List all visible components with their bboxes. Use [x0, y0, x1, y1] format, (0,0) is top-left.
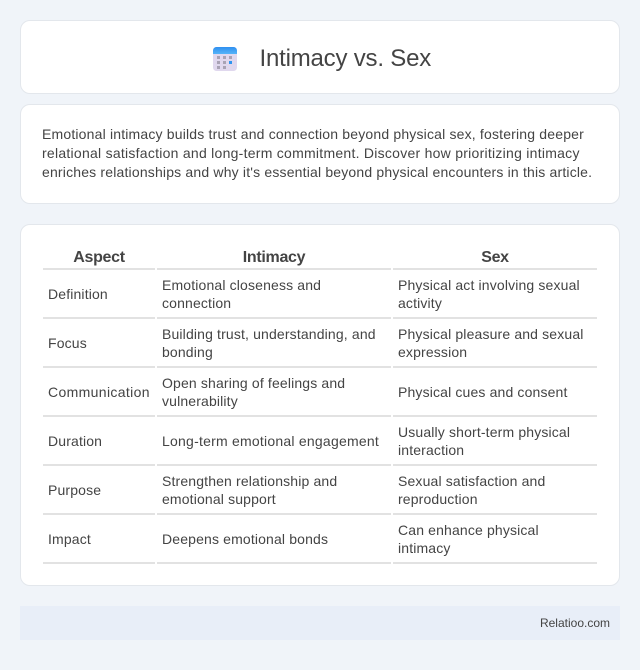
row: Impact	[48, 522, 539, 556]
row: Communication: Physical cues and consent	[398, 384, 568, 400]
intro paragraph: relational satisfaction and long-term commitment. Discover how prioritizing intimacy	[42, 145, 580, 161]
row: Duration: interaction	[398, 442, 464, 458]
row: Purpose: reproduction	[398, 491, 478, 507]
row: Communication: Communication	[48, 384, 150, 400]
row: Duration: Long-term emotional engagement	[162, 433, 379, 449]
row: Purpose: Strengthen relationship and	[162, 473, 337, 489]
row: Duration: Duration	[48, 433, 102, 449]
column header: Aspect: Aspect	[73, 249, 125, 266]
title: Intimacy vs. Sex	[260, 45, 431, 72]
row: Focus: bonding	[162, 344, 213, 360]
footer source text: Relatioo.com	[540, 616, 610, 630]
icon: calendar	[213, 47, 237, 71]
row: Focus: Focus	[48, 335, 87, 351]
row: Definition	[48, 277, 580, 311]
row: Communication	[48, 375, 568, 409]
row: Definition: Definition	[48, 286, 108, 302]
footer bar	[20, 606, 620, 640]
header panel	[20, 20, 620, 94]
intro text panel	[20, 104, 620, 204]
column header: Sex: Sex	[481, 249, 509, 266]
intro paragraph	[42, 126, 592, 180]
row: Purpose	[48, 473, 545, 507]
comparison table panel	[20, 224, 620, 586]
row: Focus: Physical pleasure and sexual	[398, 326, 584, 342]
column header: Intimacy: Intimacy	[243, 249, 305, 266]
row: Focus	[48, 326, 584, 360]
row: Definition: Emotional closeness and	[162, 277, 321, 293]
row: Purpose: emotional support	[162, 491, 276, 507]
row: Definition: activity	[398, 295, 442, 311]
intro paragraph: Emotional intimacy builds trust and connection beyond physical sex, fostering deeper	[42, 126, 584, 142]
row: Definition: connection	[162, 295, 231, 311]
row: Impact: Can enhance physical	[398, 522, 539, 538]
row: Impact: Impact	[48, 531, 91, 547]
intro paragraph: enriches relationships and why it's essential beyond physical encounters in this article.	[42, 164, 592, 180]
row: Purpose: Sexual satisfaction and	[398, 473, 545, 489]
row: Duration: Usually short-term physical	[398, 424, 570, 440]
row: Focus: Building trust, understanding, and	[162, 326, 376, 342]
row: Focus: expression	[398, 344, 467, 360]
row: Communication: vulnerability	[162, 393, 238, 409]
comparison table	[43, 249, 597, 564]
row: Impact: Deepens emotional bonds	[162, 531, 328, 547]
row: Duration	[48, 424, 570, 458]
row: Purpose: Purpose	[48, 482, 101, 498]
row: Communication: Open sharing of feelings and	[162, 375, 345, 391]
row: Impact: intimacy	[398, 540, 451, 556]
row: Definition: Physical act involving sexual	[398, 277, 580, 293]
